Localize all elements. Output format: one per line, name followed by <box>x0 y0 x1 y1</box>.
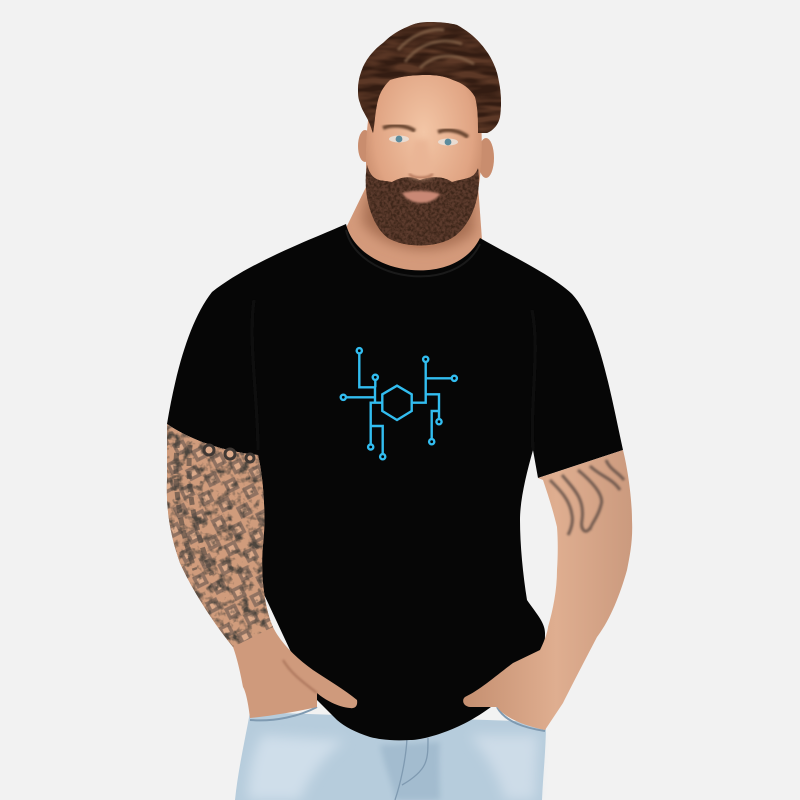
beard <box>366 165 479 246</box>
forearm tattoo strands <box>550 460 624 535</box>
ears <box>358 130 372 162</box>
head <box>358 22 501 248</box>
fingers shading <box>283 660 317 693</box>
right arm with hand in pocket <box>463 450 632 730</box>
shirt print: circuit hexagon graphic <box>341 348 457 459</box>
left arm with hand in pocket <box>167 424 357 718</box>
left traces <box>346 353 383 454</box>
hair <box>358 22 501 133</box>
nose <box>408 140 434 178</box>
terminal nodes <box>341 348 457 459</box>
sleeve tattoo <box>167 424 273 647</box>
right traces <box>412 362 452 439</box>
jeans <box>235 707 546 800</box>
neck <box>346 187 482 270</box>
face <box>366 69 482 248</box>
mouth <box>402 191 440 203</box>
black t-shirt <box>167 224 623 740</box>
eyes <box>389 136 409 142</box>
photo scene: man wearing black t-shirt <box>166 22 632 800</box>
central hexagon <box>382 386 412 420</box>
eyebrows <box>383 126 415 131</box>
